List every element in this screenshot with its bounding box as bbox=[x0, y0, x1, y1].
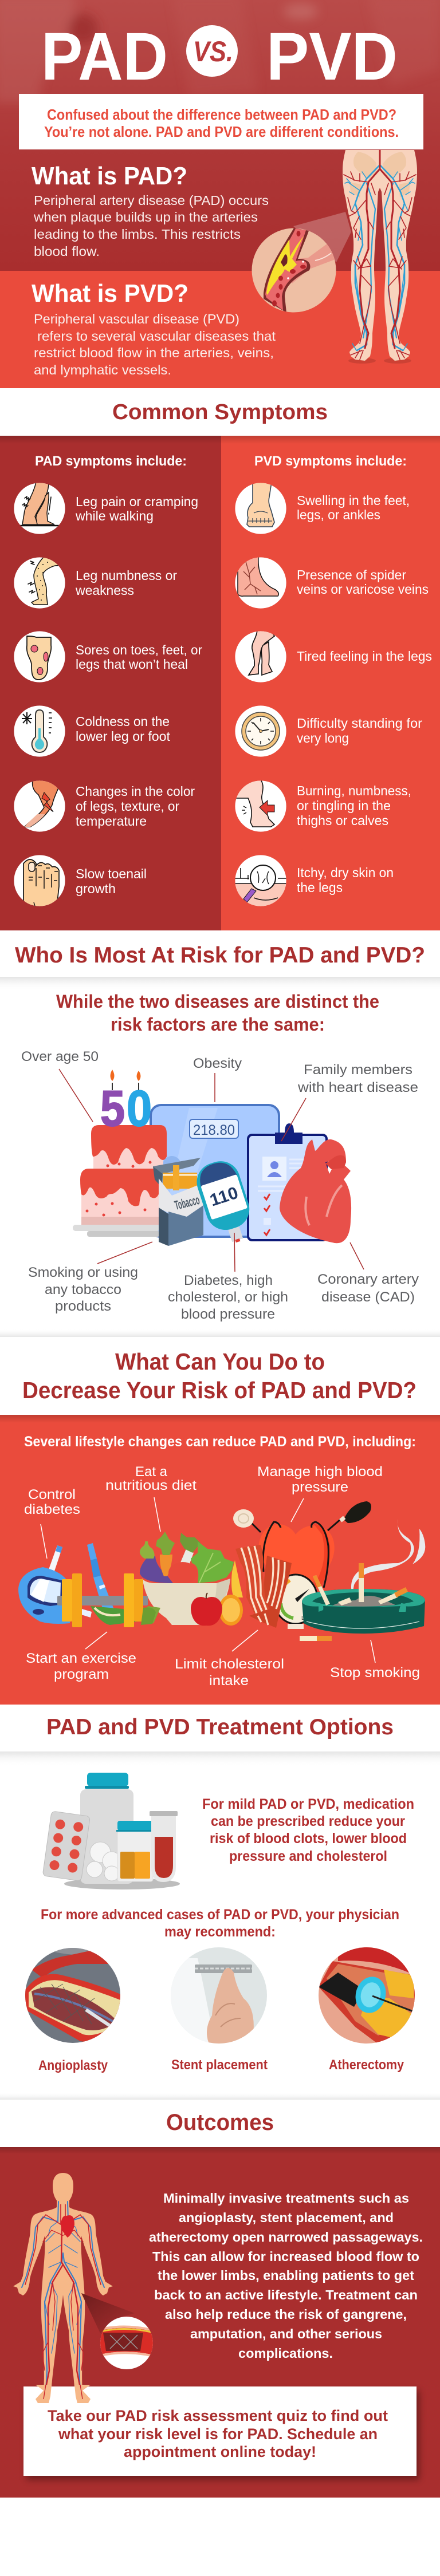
label: limit cholesterol: intake bbox=[209, 1673, 249, 1689]
illustration: glucometer bbox=[18, 1545, 70, 1624]
text: PAD definition: Peripheral artery disease (PAD) occurs bbox=[34, 193, 269, 208]
icon: dry skin magnifier bbox=[234, 855, 287, 908]
illustration: heart bbox=[280, 1139, 351, 1243]
text: outcomes paragraph: This can allow for increased blood flow to bbox=[152, 2249, 419, 2264]
label: exercise program bbox=[26, 1651, 136, 1682]
callout: call to action: appointment online today! bbox=[124, 2443, 316, 2460]
text: outcomes paragraph: amputation, and other serious bbox=[190, 2326, 382, 2341]
label: family members: with heart disease bbox=[297, 1080, 418, 1095]
illustration: smoke and ashtray bbox=[300, 1519, 425, 1641]
illustration: tobacco pack: Tobacco bbox=[173, 1193, 201, 1213]
text: dry skin: the legs bbox=[297, 880, 343, 895]
panel: lifestyle changes bbox=[0, 1415, 440, 1705]
text: outcomes paragraph: also help reduce the risk of gangrene, bbox=[165, 2307, 407, 2322]
text: difficulty standing: very long bbox=[297, 731, 349, 745]
illustration: heart with stethoscope and cuff bbox=[233, 1501, 371, 1588]
illustration: scale: 218.80 bbox=[193, 1122, 235, 1138]
panel: hero introduction bbox=[0, 0, 440, 388]
text: PAD definition: blood flow. bbox=[34, 244, 100, 259]
icon: foot sores bbox=[14, 631, 65, 683]
label: coronary artery disease: Coronary artery bbox=[317, 1272, 419, 1287]
illustration: birthday cake: 5 bbox=[100, 1080, 125, 1137]
text: dry skin bbox=[297, 865, 394, 895]
heading: Who is most at risk: Who Is Most At Risk for PAD and PVD? bbox=[15, 943, 425, 968]
icon: burning calf bbox=[234, 780, 286, 832]
label: manage blood pressure: pressure bbox=[292, 1480, 348, 1495]
illustration: feet over callout bbox=[36, 2385, 91, 2403]
label: manage blood pressure: Manage high blood bbox=[257, 1464, 383, 1480]
text: leg pain bbox=[75, 494, 198, 523]
callout: call to action: what your risk level is for PAD. Schedule an bbox=[58, 2425, 378, 2443]
label: family members bbox=[297, 1062, 418, 1095]
heading: risk factors subtitle bbox=[56, 991, 379, 1035]
text: difficulty standing bbox=[297, 716, 422, 745]
text: advanced cases: For more advanced cases of PAD or PVD, your physician bbox=[41, 1907, 399, 1923]
text: advanced cases: may recommend: bbox=[164, 1924, 276, 1940]
text: outcomes paragraph: the lower limbs, enabling patients to get bbox=[158, 2268, 414, 2283]
label: limit cholesterol: Limit cholesterol bbox=[175, 1656, 284, 1672]
panel: treatment options bbox=[25, 1773, 415, 2073]
label: atherectomy: Atherectomy bbox=[329, 2057, 404, 2073]
text: PAD definition: when plaque builds up in the arteries bbox=[33, 210, 258, 224]
text: spider veins: veins or varicose veins bbox=[297, 582, 429, 597]
text: burning numbness: or tingling in the bbox=[297, 798, 391, 813]
text: foot sores: legs that won’t heal bbox=[76, 657, 188, 672]
panel: risk factors bbox=[21, 991, 419, 1322]
title: PVD: PVD bbox=[266, 19, 398, 94]
text: mild treatment bbox=[202, 1796, 414, 1864]
pointer lines bbox=[41, 1497, 375, 1663]
heading: treatment options: PAD and PVD Treatment Options bbox=[46, 1715, 394, 1739]
callout: intro box: You’re not alone. PAD and PVD are different conditions. bbox=[44, 123, 399, 140]
heading: Common Symptoms: Common Symptoms bbox=[112, 400, 328, 424]
text: leg numbness: weakness bbox=[75, 583, 134, 598]
label: nutritious diet: Eat a bbox=[135, 1464, 167, 1480]
text: outcomes paragraph: Minimally invasive treatments such as bbox=[163, 2191, 409, 2206]
panel: PAD symptoms bbox=[0, 436, 221, 930]
illustration: vegetable bowl bbox=[140, 1532, 243, 1625]
text: PVD definition: and lymphatic vessels. bbox=[34, 362, 171, 377]
text: swelling bbox=[297, 493, 410, 522]
illustration: apple and orange bbox=[191, 1593, 243, 1626]
text: foot sores bbox=[76, 642, 202, 672]
illustration: blood pressure gauge bbox=[274, 1575, 317, 1629]
text: mild treatment: risk of blood clots, lower blood bbox=[210, 1831, 407, 1847]
heading: decrease your risk bbox=[22, 1348, 417, 1403]
label: exercise program: Start an exercise bbox=[26, 1651, 136, 1666]
text: color changes: Changes in the color bbox=[76, 784, 195, 799]
text: color changes bbox=[76, 784, 195, 829]
label: diabetes: Diabetes, high bbox=[184, 1273, 273, 1288]
text: leg numbness bbox=[75, 568, 177, 598]
label: stent placement: Stent placement bbox=[171, 2057, 268, 2073]
text: difficulty standing: Difficulty standing for bbox=[297, 716, 422, 731]
text: burning numbness bbox=[297, 783, 411, 828]
icon: tired legs bbox=[235, 630, 286, 683]
icon: leg color change bbox=[14, 780, 65, 832]
icon: leg numbness bbox=[14, 557, 65, 609]
text: outcomes paragraph: atherectomy open narrowed passageways. bbox=[149, 2230, 423, 2244]
label: stop smoking: Stop smoking bbox=[330, 1665, 420, 1680]
label: smoking: products bbox=[55, 1299, 111, 1314]
text: mild treatment: can be prescribed reduce your bbox=[211, 1813, 405, 1829]
illustration: clipboard bbox=[248, 1123, 327, 1240]
label: exercise program: program bbox=[54, 1667, 109, 1682]
text: leg numbness: Leg numbness or bbox=[76, 568, 177, 583]
illustration: atherectomy bbox=[319, 1947, 415, 2044]
label: family members: Family members bbox=[304, 1062, 412, 1078]
text: spider veins: Presence of spider bbox=[297, 567, 406, 582]
icon: swollen foot bbox=[235, 482, 286, 534]
illustration: lancet pen bbox=[81, 1543, 117, 1622]
panel: outcomes bbox=[0, 2147, 440, 2498]
text: PVD definition: Peripheral vascular disease (PVD) bbox=[34, 311, 239, 326]
text: mild treatment: pressure and cholesterol bbox=[229, 1848, 387, 1864]
heading: lifestyle changes: Several lifestyle changes can reduce PAD and PVD, including: bbox=[24, 1434, 416, 1450]
illustration: glucose meter: 110 bbox=[207, 1184, 241, 1210]
illustration: angioplasty bbox=[25, 1944, 123, 2043]
callout: call to action: Take our PAD risk assessment quiz to find out bbox=[48, 2407, 388, 2424]
text: outcomes paragraph bbox=[149, 2191, 423, 2361]
illustration: legs with blood vessels bbox=[343, 150, 417, 364]
text: dry skin: Itchy, dry skin on bbox=[297, 865, 394, 880]
text: mild treatment: For mild PAD or PVD, medication bbox=[202, 1796, 414, 1812]
text: color changes: of legs, texture, or bbox=[76, 799, 179, 814]
text: foot sores: Sores on toes, feet, or bbox=[76, 642, 202, 657]
illustration: blood pressure gauge: Low bbox=[301, 1615, 312, 1622]
label: nutritious diet: nutritious diet bbox=[105, 1478, 197, 1493]
title: PAD: PAD bbox=[41, 19, 168, 94]
pointer lines bbox=[59, 1069, 364, 1272]
heading: What is PVD: What is PVD? bbox=[32, 279, 188, 307]
text: toenail growth bbox=[76, 866, 147, 896]
heading: outcomes: Outcomes bbox=[166, 2110, 274, 2135]
heading: PAD symptoms: PAD symptoms include: bbox=[35, 453, 187, 469]
icon: VS badge bbox=[186, 25, 238, 77]
heading: PVD symptoms: PVD symptoms include: bbox=[254, 453, 407, 469]
illustration: birthday cake: 0 bbox=[127, 1080, 152, 1137]
label: control diabetes: Control bbox=[28, 1487, 76, 1502]
icon: VS badge: VS. bbox=[193, 35, 233, 68]
heading: decrease your risk: What Can You Do to bbox=[115, 1348, 325, 1375]
label: diabetes: cholesterol, or high bbox=[168, 1289, 288, 1305]
text: burning numbness: Burning, numbness, bbox=[297, 783, 411, 798]
text: PAD definition: leading to the limbs. This restricts bbox=[34, 227, 241, 242]
text: PVD definition bbox=[34, 311, 276, 377]
icon: toenails bbox=[14, 855, 65, 908]
icon: clock bbox=[235, 705, 286, 757]
text: coldness bbox=[76, 714, 171, 744]
label: limit cholesterol bbox=[175, 1656, 284, 1689]
illustration: glucose meter bbox=[192, 1156, 259, 1249]
illustration: stent inset bbox=[81, 2293, 154, 2369]
text: toenail growth: growth bbox=[76, 881, 116, 896]
heading: decrease your risk: Decrease Your Risk of PAD and PVD? bbox=[22, 1377, 417, 1403]
text: color changes: temperature bbox=[76, 814, 147, 829]
label: coronary artery disease: disease (CAD) bbox=[321, 1289, 415, 1305]
label: over age 50: Over age 50 bbox=[21, 1049, 99, 1064]
label: angioplasty: Angioplasty bbox=[38, 2058, 108, 2073]
text: outcomes paragraph: back to an active lifestyle. Treatment can bbox=[154, 2287, 418, 2302]
text: PAD definition bbox=[33, 193, 269, 259]
callout: intro box bbox=[19, 94, 423, 149]
label: control diabetes: diabetes bbox=[24, 1502, 80, 1517]
illustration: scale bbox=[151, 1105, 279, 1237]
label: control diabetes bbox=[24, 1487, 80, 1517]
illustration: medication bbox=[42, 1773, 180, 1889]
illustration: birthday cake bbox=[73, 1070, 167, 1237]
icon: leg pain bbox=[14, 482, 65, 534]
label: smoking: Smoking or using bbox=[28, 1265, 138, 1280]
text: outcomes paragraph: angioplasty, stent placement, and bbox=[179, 2210, 394, 2225]
text: PVD definition: restrict blood flow in the arteries, veins, bbox=[34, 345, 274, 360]
heading: What is PAD: What is PAD? bbox=[32, 162, 187, 190]
text: burning numbness: thighs or calves bbox=[297, 813, 388, 828]
panel: PVD symptoms bbox=[221, 436, 440, 930]
text: tired feeling: Tired feeling in the legs bbox=[297, 649, 432, 664]
heading: risk factors subtitle: risk factors are the same: bbox=[111, 1014, 325, 1035]
text: PVD definition: refers to several vascular diseases that bbox=[37, 329, 276, 344]
text: spider veins bbox=[297, 567, 429, 597]
illustration: plaque zoom inset bbox=[252, 212, 351, 313]
callout: intro box: Confused about the difference between PAD and PVD? bbox=[47, 106, 396, 123]
illustration: bacon bbox=[235, 1545, 292, 1628]
label: obesity: Obesity bbox=[193, 1056, 242, 1071]
text: swelling: Swelling in the feet, bbox=[297, 493, 410, 508]
illustration: tobacco pack bbox=[153, 1158, 203, 1246]
label: nutritious diet bbox=[105, 1464, 197, 1493]
label: diabetes: blood pressure bbox=[181, 1307, 275, 1322]
text: toenail growth: Slow toenail bbox=[76, 866, 147, 881]
text: coldness: lower leg or foot bbox=[76, 729, 171, 744]
callout: call to action bbox=[23, 2386, 419, 2480]
text: advanced cases bbox=[41, 1907, 399, 1940]
text: leg pain: while walking bbox=[75, 508, 154, 523]
label: smoking bbox=[28, 1265, 138, 1314]
text: leg pain: Leg pain or cramping bbox=[76, 494, 198, 509]
label: coronary artery disease bbox=[317, 1272, 419, 1305]
label: diabetes bbox=[168, 1273, 288, 1322]
heading: risk factors subtitle: While the two diseases are distinct the bbox=[56, 991, 379, 1012]
label: smoking: any tobacco bbox=[45, 1282, 121, 1297]
icon: spider veins bbox=[235, 557, 286, 609]
icon: thermometer bbox=[14, 705, 65, 757]
illustration: dumbbell bbox=[57, 1573, 156, 1627]
illustration: stent placement bbox=[171, 1947, 267, 2044]
text: outcomes paragraph: complications. bbox=[238, 2346, 333, 2361]
label: manage blood pressure bbox=[257, 1464, 383, 1495]
text: coldness: Coldness on the bbox=[76, 714, 170, 729]
illustration: human circulatory system bbox=[13, 2173, 113, 2403]
text: swelling: legs, or ankles bbox=[297, 507, 380, 522]
